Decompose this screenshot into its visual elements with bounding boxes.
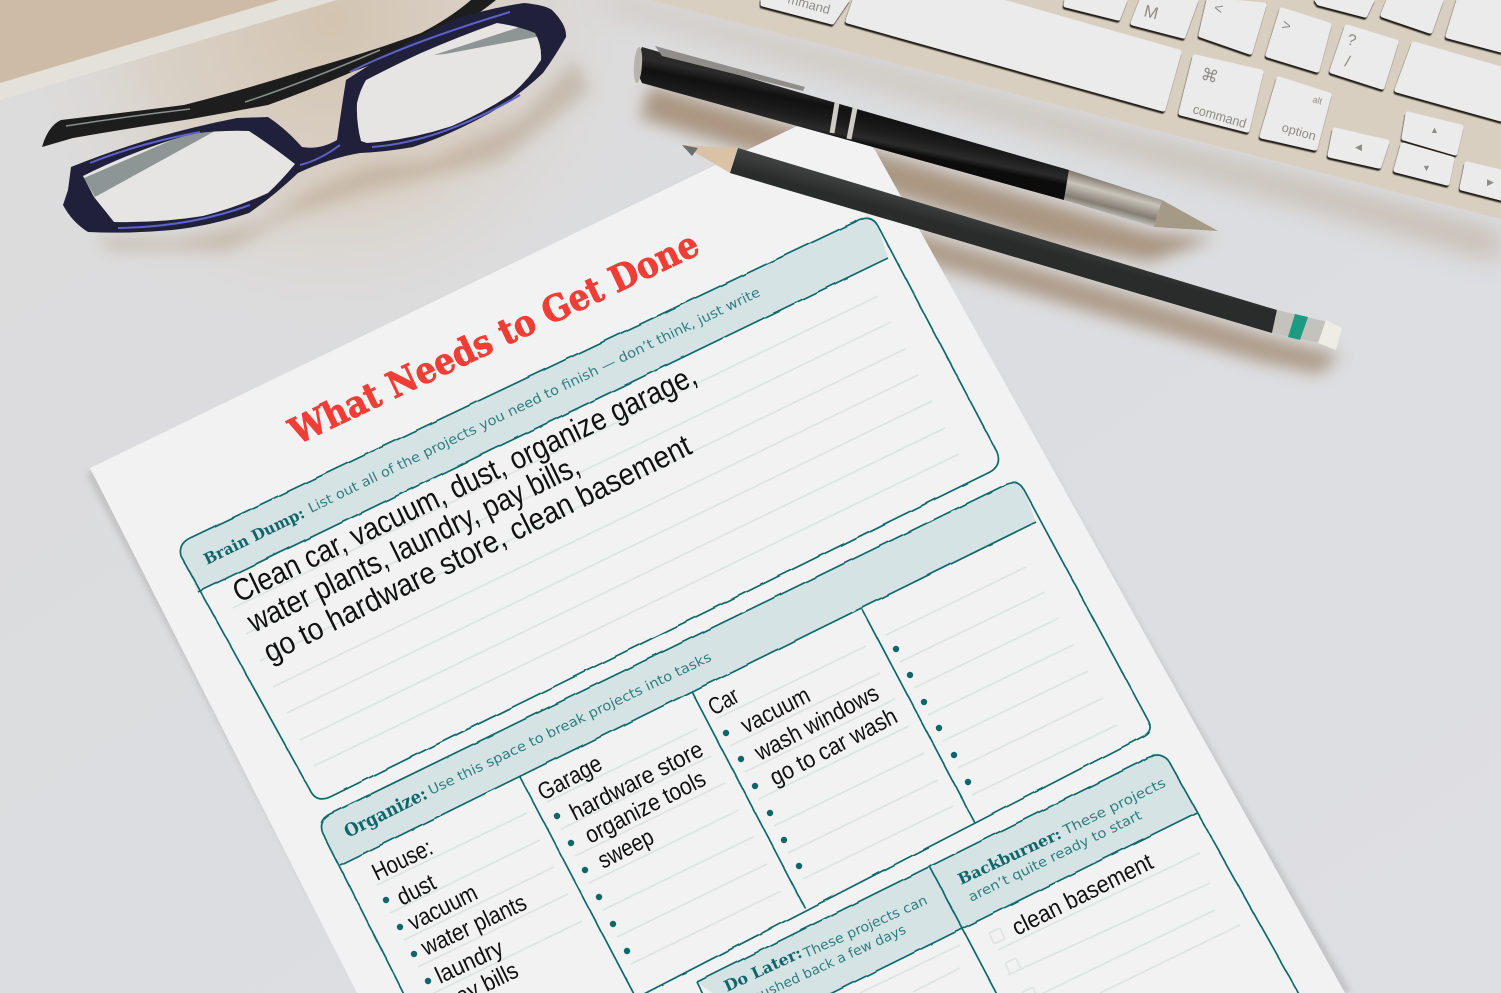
- brain dump outline: [180, 218, 998, 799]
- temple seen through lenses: [84, 130, 215, 197]
- brain dump header band: [181, 215, 888, 592]
- handwritten house list: dust: [392, 869, 441, 911]
- organize instruction: Use this space to break projects into tasks: [426, 649, 714, 799]
- handwritten house list: House:: [368, 834, 437, 886]
- checkboxes: [989, 928, 1038, 993]
- panel: brain dump: [180, 215, 998, 799]
- temple arm: [42, 0, 496, 147]
- key legends: M: [1142, 1, 1160, 23]
- key legends: [786, 0, 1494, 187]
- handwritten garage list: organize tools: [580, 765, 710, 849]
- pencil band: [1288, 314, 1308, 340]
- pen cap ring: [633, 47, 643, 83]
- key legends: ⌘: [1199, 65, 1220, 87]
- paper shadow: [86, 112, 1352, 993]
- lower outline: [697, 755, 1300, 993]
- handwritten garage list: [533, 736, 710, 874]
- handwritten brain dump: water plants, laundry, pay bills,: [241, 448, 585, 640]
- keys: [763, 0, 1501, 198]
- brain dump writing lines: [233, 296, 959, 766]
- pen clip: [655, 46, 805, 91]
- pen shadow: [640, 85, 1215, 262]
- pencil ferrule: [1272, 310, 1328, 343]
- handwritten garage list: Garage: [533, 750, 607, 806]
- pencil: [682, 145, 1342, 350]
- pencil eraser: [1318, 320, 1342, 350]
- pencil body: [730, 148, 1277, 333]
- title: What Needs to Get Done: [282, 223, 706, 454]
- handwritten car list: go to car wash: [765, 703, 902, 791]
- pencil point: [682, 145, 738, 173]
- handwritten garage list: sweep: [593, 824, 658, 874]
- glasses: [42, 0, 590, 250]
- panel: organize: [321, 480, 1150, 993]
- handwritten backburner item: clean basement: [1008, 848, 1158, 941]
- organize label: Organize:: [341, 784, 431, 842]
- handwritten garage list: hardware store: [565, 736, 708, 826]
- backburner note: These projects: [1060, 775, 1168, 839]
- pen metal tip: [1064, 170, 1162, 227]
- key legends: command: [1191, 101, 1248, 131]
- handwritten car list: wash windows: [750, 680, 883, 767]
- lower header band: [697, 754, 1198, 993]
- handwritten house list: laundry: [431, 935, 508, 989]
- handwritten brain dump: Clean car, vacuum, dust, organize garage,: [227, 357, 702, 609]
- handwritten house list: [368, 834, 531, 993]
- key legends: <: [1212, 0, 1225, 18]
- pencil shadow: [725, 178, 1340, 374]
- bullets: [383, 646, 971, 984]
- handwritten brain dump: go to hardware store, clean basement: [258, 427, 697, 669]
- backburner label: Backburner:: [955, 824, 1064, 889]
- brain dump label: Brain Dump:: [200, 503, 308, 569]
- handwritten car list: [704, 680, 902, 791]
- key legends: ◀: [1355, 142, 1362, 152]
- lens glass: [83, 23, 541, 222]
- panel: do later and backburner: [697, 754, 1300, 993]
- handwritten car list: vacuum: [736, 682, 815, 739]
- notebook: [0, 0, 337, 100]
- key legends: ▼: [1422, 163, 1431, 173]
- lower writing lines: [860, 853, 1240, 993]
- keyboard: [650, 0, 1501, 219]
- key legends: alt: [1311, 94, 1324, 107]
- worksheet: [180, 215, 1300, 993]
- handwritten car list: Car: [704, 682, 744, 721]
- paper sheet: [90, 112, 1345, 993]
- key legends: ?: [1345, 31, 1358, 50]
- key legends: ▶: [1487, 177, 1494, 187]
- frame: [63, 3, 566, 233]
- keyboard body: [650, 0, 1501, 219]
- warm light on desk: [0, 0, 800, 400]
- keyboard shadow: [590, 0, 1501, 258]
- organize outline and columns: [321, 483, 1150, 993]
- organize writing lines: [377, 567, 1117, 993]
- handwritten house list: vacuum: [404, 879, 482, 936]
- frame highlights: [90, 12, 520, 228]
- brain dump instruction: List out all of the projects you need to finish — don’t think, just write: [306, 285, 763, 517]
- handwritten house list: water plants: [416, 889, 531, 962]
- key legends: /: [1343, 53, 1352, 71]
- pen rings: [832, 103, 855, 139]
- organize header band: [322, 480, 1036, 865]
- key legends: ▲: [1430, 125, 1439, 135]
- backburner note line two: aren’t quite ready to start: [966, 807, 1144, 906]
- pen: [633, 46, 1218, 231]
- key legends: option: [1280, 120, 1318, 144]
- do later note: These projects can: [800, 893, 930, 962]
- pen barrel: [634, 47, 1069, 200]
- key legends: >: [1280, 16, 1293, 35]
